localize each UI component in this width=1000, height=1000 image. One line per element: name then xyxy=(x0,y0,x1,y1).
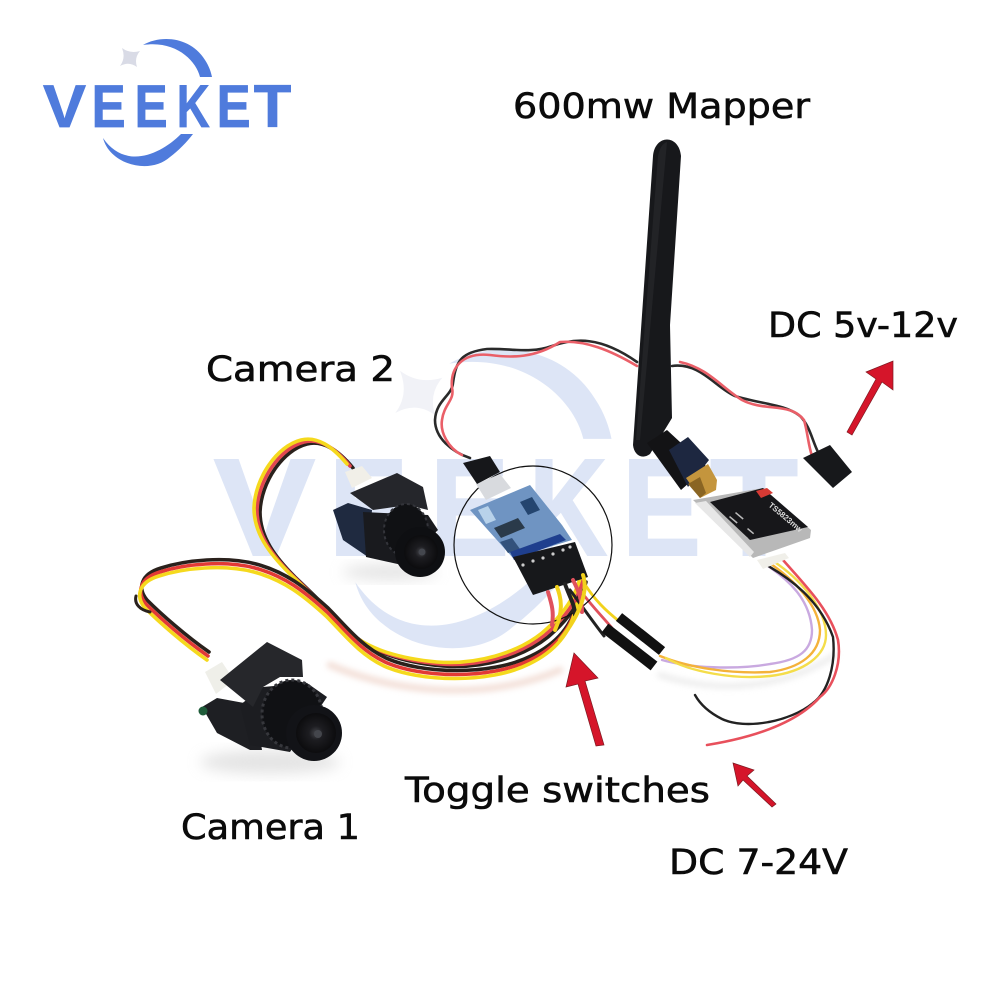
watermark: faded VEEKET logo: E xyxy=(430,431,509,585)
arrow: toggle switches xyxy=(566,653,604,746)
connector: DC 5v-12v plug xyxy=(803,445,852,488)
watermark: faded VEEKET logo: E xyxy=(329,431,408,585)
soft shadows under parts xyxy=(200,564,835,774)
wires: camera 2 harness xyxy=(254,439,586,666)
camera 1 xyxy=(198,642,342,761)
label: DC 7-24V: DC 7-24V xyxy=(669,843,848,883)
heat shrink sleeves xyxy=(605,617,662,666)
camera 2 xyxy=(333,466,445,577)
wires: transmitter harness and DC 7-24V leads xyxy=(570,560,839,745)
logo: VEEKET: E xyxy=(135,73,168,140)
watermark: faded VEEKET logo: T xyxy=(710,431,798,585)
transmitter module xyxy=(693,488,811,569)
transmitter module: TS5823mw xyxy=(767,501,805,535)
antenna xyxy=(633,140,717,498)
circle highlighting switcher board xyxy=(454,466,612,624)
label: Camera 2: Camera 2 xyxy=(206,350,395,390)
logo: VEEKET xyxy=(43,39,291,166)
label: DC 5v-12v: DC 5v-12v xyxy=(768,306,958,346)
logo: VEEKET: T xyxy=(254,73,291,140)
logo: VEEKET: E xyxy=(92,73,126,140)
watermark: faded VEEKET logo xyxy=(214,350,798,648)
logo: VEEKET: V xyxy=(43,73,86,140)
label: Camera 1: Camera 1 xyxy=(181,808,360,848)
arrow: DC 7-24V xyxy=(733,763,776,807)
watermark: faded VEEKET logo: E xyxy=(622,431,701,585)
label: Toggle switches: Toggle switches xyxy=(404,771,710,811)
arrow: DC 5v-12v xyxy=(847,361,893,435)
watermark: faded VEEKET logo: K xyxy=(529,431,607,585)
wires: power lead to DC 5v-12v xyxy=(435,341,818,458)
logo: VEEKET: E xyxy=(217,73,251,140)
label: 600mw Mapper: 600mw Mapper xyxy=(513,87,811,127)
switcher board xyxy=(463,456,588,640)
logo: VEEKET: K xyxy=(177,73,210,140)
wires: camera 1 harness xyxy=(136,560,579,678)
watermark: faded VEEKET logo: V xyxy=(214,431,315,585)
